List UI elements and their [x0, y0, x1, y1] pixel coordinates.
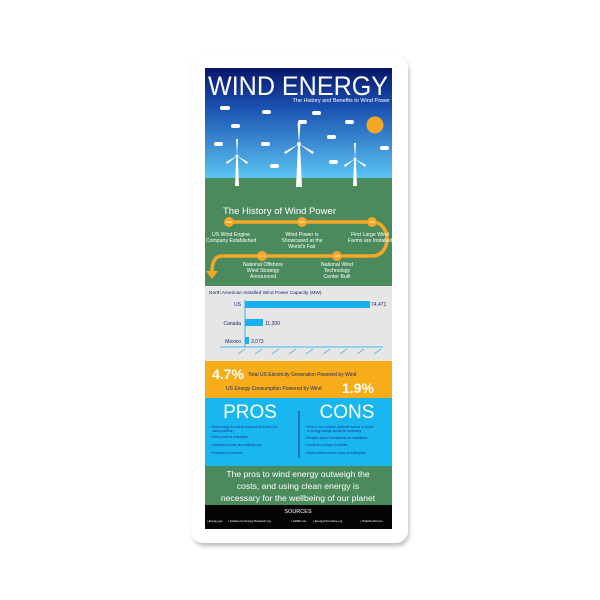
- stats band: Total US Electricity Generation Powered by Wind: [248, 372, 357, 378]
- icon: turbine right: [344, 143, 366, 186]
- timeline section: 1850: [226, 220, 233, 224]
- timeline section: 1995: [334, 254, 341, 258]
- pros and cons panel: • Operational costs are relatively low: [210, 443, 262, 447]
- pros and cons panel: • Wind turbines can be noisy and disruptive: [305, 451, 366, 455]
- timeline path: [212, 222, 387, 272]
- title: WIND ENERGY: [208, 71, 388, 101]
- timeline section: 1893: [299, 220, 306, 224]
- sticker shadow: [193, 59, 409, 546]
- timeline section: National Wind: [321, 262, 353, 268]
- sources: • Institute for Energy Research.org: [228, 519, 271, 523]
- pros and cons panel: or energy storage would be necessary: [307, 429, 361, 433]
- icon: turbine middle: [284, 123, 314, 187]
- pros and cons panel: • Wind is not constant, alternate source of power: [305, 425, 374, 429]
- conclusion: [205, 466, 392, 505]
- sources: • EnergyInformative.org: [313, 519, 343, 523]
- pros and cons panel: PROS: [223, 402, 277, 423]
- heading: The History of Wind Power: [223, 206, 336, 217]
- timeline section: Announced: [250, 274, 276, 280]
- icon: sun: [366, 116, 384, 134]
- bar chart: 3,073: [251, 339, 264, 345]
- timeline section: World's Fair: [288, 244, 316, 250]
- sources: SOURCES: [284, 509, 312, 515]
- conclusion: costs, and using clean energy is: [237, 481, 359, 491]
- sticker border: [191, 56, 408, 543]
- sources: • GWEC.net: [291, 519, 306, 523]
- pros and cons panel: • Potential is enormous: [210, 451, 243, 455]
- pros and cons panel: CONS: [320, 402, 374, 423]
- timeline section: Wind Power is: [285, 232, 319, 238]
- timeline section: [206, 206, 392, 280]
- timeline section: Company Established: [206, 238, 256, 244]
- sky header: [205, 68, 392, 178]
- conclusion: The pros to wind energy outweigh the: [226, 469, 370, 479]
- bar chart: North American Installed Wind Power Capacity (MW): [209, 290, 322, 296]
- sources: • TriplePundit.com: [360, 519, 383, 523]
- stats band: 1.9%: [342, 380, 374, 396]
- timeline section: Technology: [324, 268, 351, 274]
- sources: [205, 505, 392, 529]
- bar chart: Canada: [223, 321, 241, 327]
- sources: • Energy.gov: [207, 519, 223, 523]
- pros and cons panel: • Could be a danger to wildlife: [305, 443, 347, 447]
- pros and cons panel: cause pollution: [212, 429, 233, 433]
- timeline section: 1980: [369, 220, 376, 224]
- timeline section: Wind Strategy: [247, 268, 280, 274]
- conclusion: necessary for the wellbeing of our planet: [221, 493, 376, 503]
- bar chart: 74,471: [371, 302, 387, 308]
- timeline section: First Large Wind: [351, 232, 389, 238]
- timeline section: National Offshore: [243, 262, 283, 268]
- pros and cons panel: • Require upfront investments for installation: [305, 436, 368, 440]
- timeline section: Showcased at the: [281, 238, 323, 244]
- pros and cons panel: [205, 398, 392, 466]
- stats band: 4.7%: [212, 366, 244, 382]
- bar chart: [205, 286, 392, 361]
- pros and cons panel: • Wind power is renewable: [210, 435, 248, 439]
- bar chart: US: [234, 302, 242, 308]
- bar chart: Mexico: [225, 339, 241, 345]
- subtitle: The History and Benefits to Wind Power: [292, 98, 390, 104]
- timeline section: Farms are Installed: [348, 238, 392, 244]
- timeline section: 2011: [259, 254, 265, 258]
- icon: turbine left: [226, 139, 248, 186]
- bar chart: 11,200: [265, 321, 280, 327]
- stats band: [205, 361, 392, 398]
- pros and cons panel: • Wind energy is a clean resource and does not: [210, 425, 277, 429]
- timeline section: US Wind Engine: [212, 232, 250, 238]
- clouds: [214, 106, 389, 168]
- green ground: [205, 178, 392, 286]
- stats band: US Energy Consumption Powered by Wind: [226, 386, 322, 392]
- timeline section: Center Built: [323, 274, 351, 280]
